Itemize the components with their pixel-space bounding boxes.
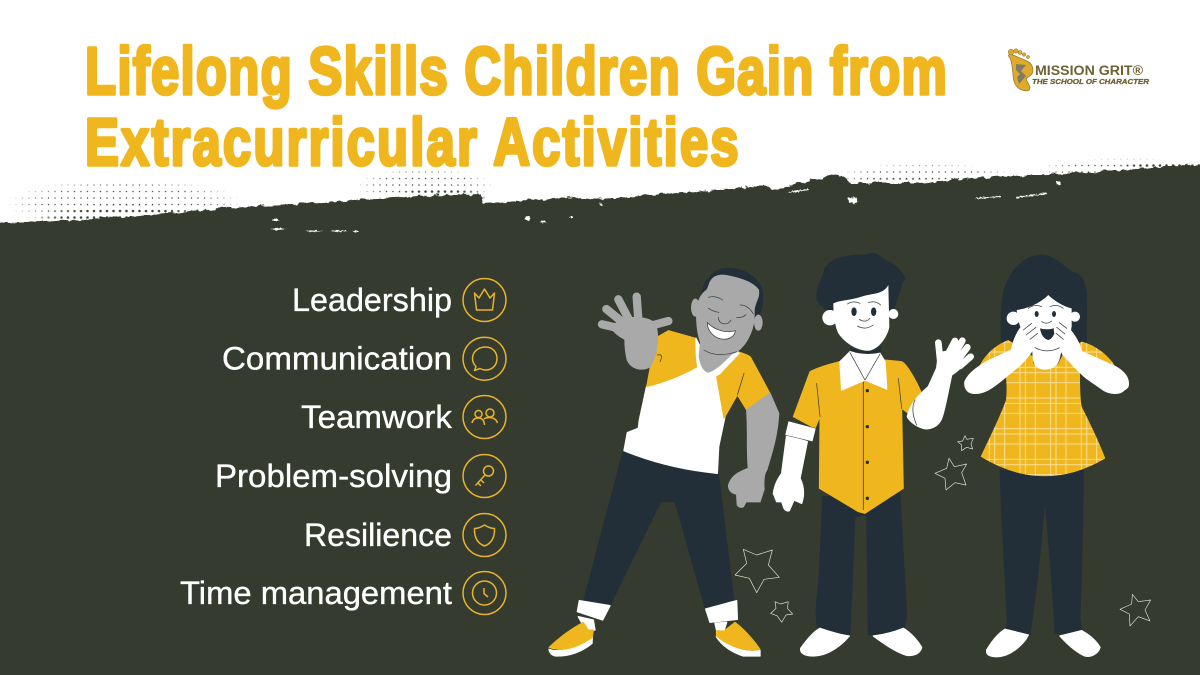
shoes white soles xyxy=(549,637,760,656)
waving fingers xyxy=(938,341,971,366)
skill: Teamwork: Teamwork xyxy=(301,399,453,435)
skill: Resilience xyxy=(304,514,506,556)
ears xyxy=(691,299,700,317)
skill: Problem-solving: Problem-solving xyxy=(215,458,452,494)
sleeve crease xyxy=(657,355,744,395)
skill: Communication: Communication xyxy=(222,340,452,376)
left cuff xyxy=(785,421,816,442)
icon: foot xyxy=(1008,49,1033,91)
face lines xyxy=(1028,305,1063,351)
title: Extracurricular Activities xyxy=(85,104,739,180)
illustration: waving boy xyxy=(549,268,793,656)
skill: Communication xyxy=(222,337,506,380)
ears xyxy=(822,310,838,325)
white header background xyxy=(0,0,1200,240)
sleeve creases xyxy=(817,378,902,417)
skill: Time management: Time management xyxy=(180,575,452,611)
logo tagline: THE SCHOOL OF CHARACTER xyxy=(1032,77,1150,86)
skills list xyxy=(180,278,506,614)
torn edge speckles xyxy=(270,181,1061,232)
illustration: boy in yellow shirt xyxy=(773,253,973,656)
skill: Resilience: Resilience xyxy=(304,517,452,553)
shoes xyxy=(801,628,849,656)
hair xyxy=(700,268,763,320)
skill: Problem-solving xyxy=(215,454,506,498)
left arm and hand xyxy=(773,435,807,511)
illustration: girl shouting xyxy=(965,255,1151,657)
collar xyxy=(840,352,887,390)
plaid top xyxy=(977,338,1120,480)
stars xyxy=(935,436,973,490)
halftone dots xyxy=(9,158,1200,219)
lower arm and hand xyxy=(729,393,779,507)
title xyxy=(85,33,947,180)
collar xyxy=(696,338,739,378)
shirt xyxy=(793,360,922,513)
shoes xyxy=(987,629,1028,657)
face xyxy=(1017,295,1072,353)
eyes xyxy=(1035,311,1039,317)
skill: Leadership xyxy=(292,278,506,322)
right sleeve xyxy=(716,352,770,418)
left arm and hand xyxy=(965,321,1038,393)
finger lines xyxy=(1023,323,1067,339)
logo: Mission Grit xyxy=(1008,49,1150,91)
skill: Leadership: Leadership xyxy=(292,282,452,318)
face lines xyxy=(704,297,753,355)
skill: Time management xyxy=(180,572,506,614)
raised hand and forearm xyxy=(612,318,657,369)
dark torn background xyxy=(0,164,1200,675)
neck xyxy=(699,342,735,372)
left sleeve xyxy=(647,331,697,387)
eyes xyxy=(851,307,857,316)
placket and buttons xyxy=(862,382,865,510)
skill: Teamwork xyxy=(301,396,506,438)
shoes xyxy=(549,622,593,649)
face lines xyxy=(847,302,881,328)
right arm and waving hand xyxy=(907,352,963,429)
ears xyxy=(1007,312,1020,325)
smile xyxy=(707,323,735,339)
cuffs xyxy=(577,601,610,620)
socks xyxy=(578,617,595,632)
open mouth xyxy=(1040,327,1056,340)
neck shadow xyxy=(850,346,882,355)
stars xyxy=(735,549,793,622)
pants xyxy=(1000,470,1083,635)
hair xyxy=(1001,255,1087,347)
raised hand fingers xyxy=(602,297,668,329)
pants xyxy=(816,493,907,635)
hair xyxy=(817,253,905,312)
title: Lifelong Skills Children Gain from xyxy=(85,33,947,109)
pants xyxy=(583,451,734,610)
star xyxy=(1120,594,1151,626)
neck xyxy=(1032,340,1063,370)
right arm and hand xyxy=(1054,322,1128,393)
head xyxy=(697,275,759,355)
logo wordmark: MISSION GRIT® xyxy=(1035,63,1143,78)
face xyxy=(833,285,889,351)
t-shirt xyxy=(624,367,725,473)
